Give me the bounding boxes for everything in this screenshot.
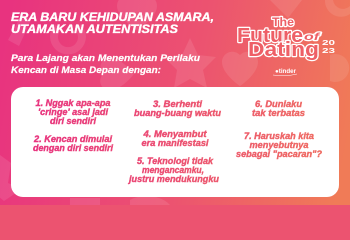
column 3 (236, 99, 323, 159)
column 3: 6. Duniaku (255, 99, 303, 109)
column 2: 3. Berhenti (153, 99, 203, 109)
column 1: 'cringe' asal jadi (38, 107, 109, 117)
subheading (11, 53, 200, 76)
logo: The Future of Dating 2023: of (304, 32, 322, 43)
logo: The Future of Dating 2023 (237, 15, 335, 76)
logo: The Future of Dating 2023: Future (237, 25, 303, 47)
column 2: mengancamku, (142, 165, 204, 175)
column 1: 1. Nggak apa-apa (36, 98, 110, 108)
column 2: justru mendukungku (128, 174, 219, 184)
column 2: buang-buang waktu (134, 108, 222, 118)
heading: ERA BARU KEHIDUPAN ASMARA, (11, 10, 214, 24)
heading (11, 10, 214, 36)
column 3: tak terbatas (252, 108, 305, 118)
column 3: menyebutnya (250, 140, 308, 150)
column 2 (128, 99, 222, 184)
column 2: 5. Teknologi tidak (137, 156, 214, 166)
heading: UTAMAKAN AUTENTISITAS (11, 22, 178, 36)
column 1: diri sendiri (50, 116, 96, 126)
white card (11, 87, 339, 197)
column 3: 7. Haruskah kita (244, 131, 314, 141)
subheading: Para Lajang akan Menentukan Perilaku (11, 53, 200, 64)
logo: The Future of Dating 2023: The (272, 15, 294, 29)
column 1 (33, 98, 113, 153)
logo: The Future of Dating 2023: 23 (322, 46, 335, 55)
subheading: Kencan di Masa Depan dengan: (11, 65, 161, 76)
column 3: sebagai "pacaran"? (236, 149, 323, 159)
column 2: 4. Menyambut (142, 129, 208, 139)
column 1: 2. Kencan dimulai (33, 134, 112, 144)
column 1: dengan diri sendiri (33, 143, 113, 153)
column 2: era manifestasi (142, 138, 209, 148)
tinder wordmark: ●tinder (275, 69, 297, 75)
logo: The Future of Dating 2023: Dating (248, 39, 319, 61)
logo: The Future of Dating 2023: 20 (322, 38, 335, 47)
